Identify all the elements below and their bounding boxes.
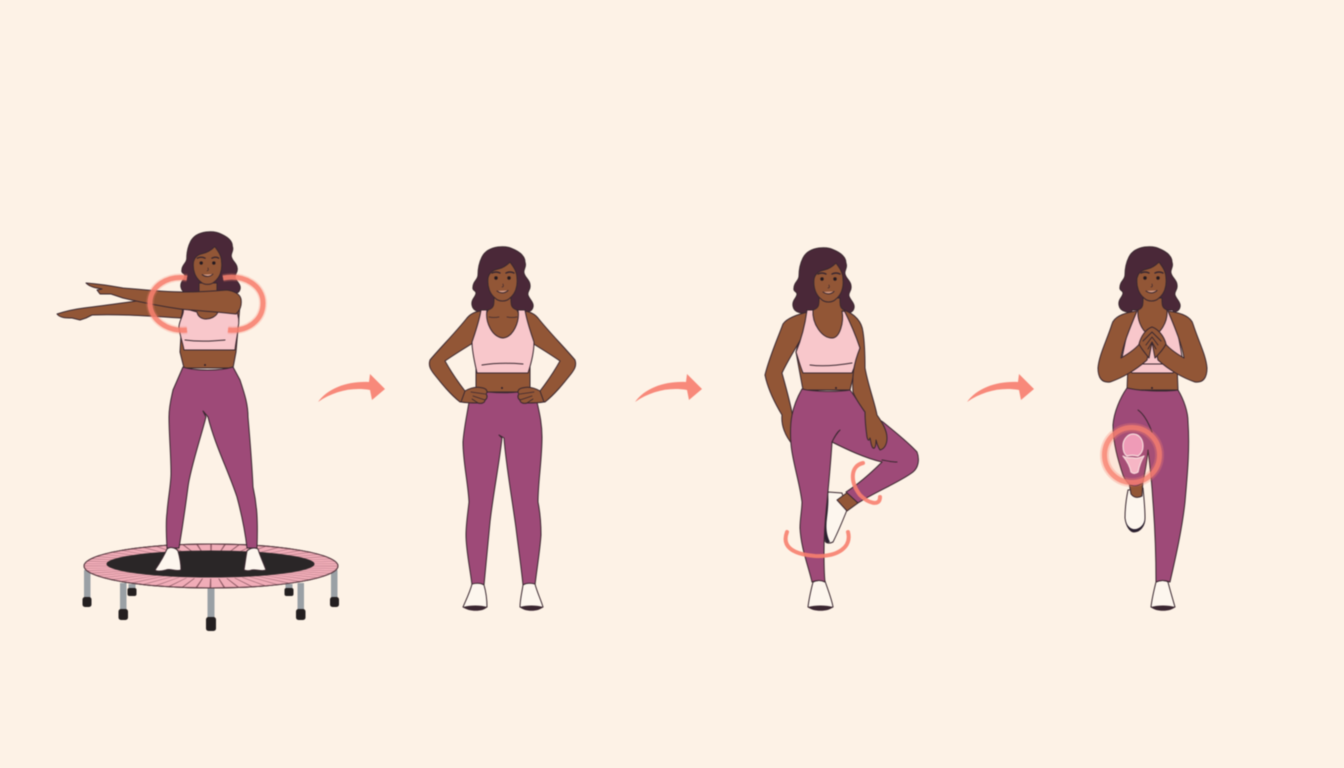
torso skin [796,298,860,390]
navel [204,364,206,366]
leggings [463,392,542,585]
right finger lines [520,392,534,403]
hair [181,232,240,294]
right hand [518,387,544,403]
finger lines [1143,332,1161,349]
icon: mini trampoline [82,544,339,631]
figure 1: arms forward on trampoline [57,232,339,631]
praying hands [1139,327,1166,358]
head [1137,262,1166,301]
right arm [517,310,576,402]
navel [501,387,503,389]
arrow 2 [635,374,702,402]
left hand [461,387,487,403]
left shoe [155,548,181,571]
lower arm [57,299,185,320]
collarbones [489,316,517,318]
bra hem line [185,340,225,341]
hair [793,248,854,313]
left arm [429,310,488,402]
sports bra [796,310,860,373]
navel [835,387,837,389]
left arm [1098,311,1151,382]
head [193,247,222,284]
leggings [1113,388,1189,582]
left arm [765,311,812,445]
knee highlight ring [1104,428,1160,482]
left finger lines [471,392,485,403]
upper arm [86,283,241,314]
bra hem line [482,363,523,365]
torso skin [1127,298,1178,390]
knee joint bones [1123,434,1144,474]
sports bra [179,308,239,350]
head [488,262,517,301]
ankle and calf rotation arcs [786,463,880,556]
ankle skin [837,492,858,511]
hair [1119,247,1180,312]
right arm [1154,311,1207,382]
navel [1151,387,1153,389]
bra hem line [810,363,852,366]
sports bra [1122,310,1182,373]
standing shoe [808,580,833,609]
shoes [463,583,543,611]
figure 4: knee raised, hands together, knee joint highlighted [1098,247,1207,611]
bra hem line [1134,363,1171,365]
head [814,263,843,302]
standing shoe [1151,580,1175,609]
torso skin [476,298,530,392]
leggings [166,367,257,548]
arrow 3 [967,374,1034,402]
thigh crease [1138,410,1152,432]
torso skin [180,283,240,368]
figure 2: hands on hips [429,247,576,611]
leggings [790,389,918,582]
ankle skin [1129,480,1143,497]
sports bra [472,310,534,373]
raised shoe [822,492,847,543]
shoulder highlight arcs [150,277,263,330]
figure 3: single-leg balance, knee raised [765,248,918,611]
knee crease [882,460,897,462]
raised shoe [1125,488,1145,532]
right arm and hand [844,310,887,450]
arrow 1 [318,374,385,402]
hair [472,247,533,312]
right shoe [244,548,266,571]
